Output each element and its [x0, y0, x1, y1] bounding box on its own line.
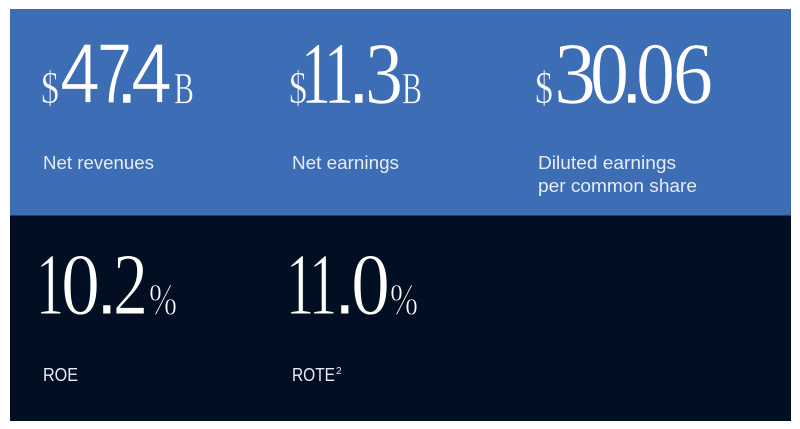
- metric: ROTE value: %: [390, 275, 418, 324]
- metric: net earnings value: B: [402, 64, 422, 113]
- metric: ROTE value: 0: [351, 237, 390, 334]
- metric: net earnings value: [289, 26, 422, 123]
- label: ROE: ROE: [43, 365, 78, 385]
- metric: ROE value: %: [149, 275, 177, 324]
- label: diluted earnings per common share: Diluted earnings: [538, 153, 676, 173]
- panel: top blue metrics: [10, 9, 791, 216]
- metric: diluted EPS value: $: [535, 62, 553, 113]
- metric: net revenues value: 4: [60, 27, 100, 122]
- metric: diluted EPS value: [535, 26, 713, 123]
- metric: ROE value: 0: [61, 237, 100, 334]
- metric: net revenues value: [41, 27, 194, 122]
- metric: net revenues value: $: [41, 62, 59, 113]
- metric: net earnings value: 3: [365, 26, 403, 123]
- metric: net revenues value: 4: [131, 27, 172, 122]
- label: ROTE with footnote: 2: [336, 366, 342, 377]
- metric: net earnings value: $: [289, 62, 307, 113]
- label: diluted earnings per common share: per common share: [538, 176, 697, 196]
- metric: ROTE value: 1: [286, 237, 314, 334]
- panel: bottom dark metrics: [10, 216, 791, 421]
- label: net revenues: Net revenues: [43, 153, 154, 173]
- metric: diluted EPS value: 3: [554, 26, 596, 123]
- metric: net earnings value: .: [347, 27, 371, 122]
- label: net earnings: Net earnings: [292, 153, 399, 173]
- metric: net earnings value: 1: [301, 26, 331, 123]
- metric: ROE value: 1: [36, 237, 64, 334]
- label: diluted earnings per common share: [538, 153, 697, 196]
- metric: net earnings value: 1: [324, 26, 354, 123]
- metric: ROE value: [36, 237, 177, 334]
- metric: diluted EPS value: 6: [673, 26, 713, 123]
- metric: diluted EPS value: 0: [590, 26, 629, 123]
- metric: ROTE value: .: [333, 238, 357, 333]
- metric: ROTE value: [286, 237, 418, 334]
- metric: ROTE value: 1: [309, 237, 337, 334]
- metric: diluted EPS value: .: [620, 27, 644, 122]
- label: ROTE with footnote: ROTE: [292, 365, 335, 385]
- metric: net revenues value: B: [174, 64, 194, 113]
- metric: ROE value: 2: [113, 237, 148, 334]
- metric: ROE value: .: [95, 238, 119, 333]
- metric: diluted EPS value: 0: [636, 26, 675, 123]
- metric: net revenues value: .: [115, 27, 139, 122]
- metric: net revenues value: 7: [97, 27, 132, 122]
